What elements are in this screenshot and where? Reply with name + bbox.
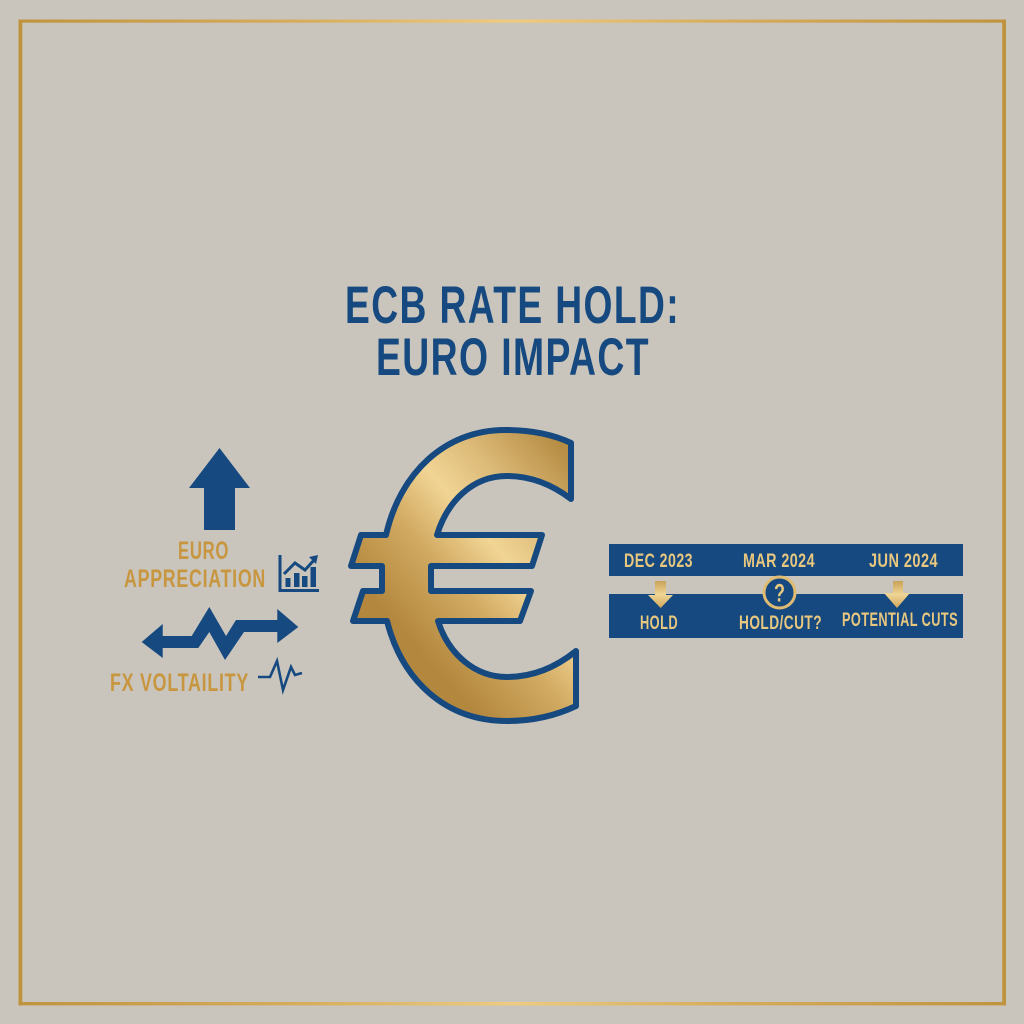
outcomes: HOLD/CUT? [739, 613, 822, 634]
title: EURO IMPACT [376, 328, 650, 387]
icon: growth chart [280, 555, 319, 590]
icon: large gold euro symbol [351, 430, 576, 721]
dates: DEC 2023 [624, 550, 693, 572]
icon: gold down arrow jun [884, 581, 910, 608]
outcomes: POTENTIAL CUTS [842, 610, 958, 631]
title: ECB RATE HOLD: [345, 276, 680, 335]
outcomes: HOLD [640, 613, 678, 634]
icon: question mark circle: ? [774, 580, 785, 608]
label: fx voltaility: FX VOLTAILITY [110, 669, 249, 697]
icon: pulse line [258, 661, 302, 690]
label: euro appreciation: EURO [178, 537, 229, 565]
icon: up arrow [189, 448, 250, 530]
label: euro appreciation: APPRECIATION [124, 565, 266, 593]
title [345, 276, 680, 387]
icon: question mark circle [764, 577, 795, 608]
icon: gold down arrow dec [648, 581, 673, 608]
panel: fx volatility [110, 607, 302, 697]
outcomes [640, 610, 958, 634]
timeline outcome bar [609, 594, 963, 638]
label: euro appreciation [124, 537, 266, 593]
dates: MAR 2024 [743, 550, 815, 572]
panel: rate timeline [609, 544, 963, 638]
icon: zigzag double arrow [142, 607, 298, 660]
dates [624, 550, 938, 572]
panel: euro appreciation [124, 448, 319, 593]
dates: JUN 2024 [869, 550, 938, 572]
timeline date bar [609, 544, 963, 576]
